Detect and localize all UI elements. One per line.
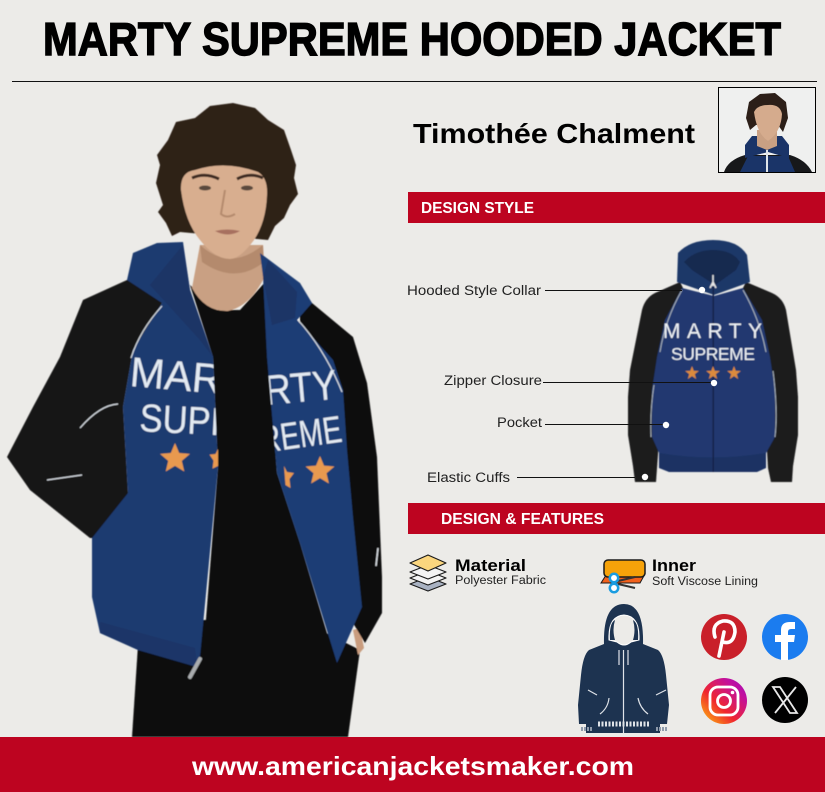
stars print (685, 366, 741, 379)
jacket lettering right (268, 369, 343, 452)
zipper and trim (588, 650, 666, 733)
star 2 (210, 449, 218, 469)
thumbnail blue front (740, 156, 795, 172)
t-shirt (190, 280, 335, 662)
thumbnail hair (746, 93, 788, 132)
right brow (237, 175, 263, 179)
piping left (47, 306, 162, 480)
icon: x (762, 677, 808, 723)
icon: fabric roll and scissors (601, 560, 645, 592)
hem ribbing (598, 722, 650, 726)
hair (156, 103, 298, 240)
label: pocket (497, 415, 669, 430)
mouth (215, 230, 240, 234)
face (181, 165, 267, 259)
hoodie body (578, 604, 669, 733)
stars on jacket (160, 443, 334, 488)
thumbnail hood (745, 136, 789, 158)
MARTY print: MARTY (663, 320, 762, 343)
feature: material (410, 555, 546, 591)
thumbnail zipper (766, 150, 768, 172)
body (652, 288, 775, 468)
fringe (179, 125, 272, 180)
product jacket artwork (628, 240, 798, 482)
hood inner (684, 250, 740, 285)
piping (651, 290, 776, 437)
icon: facebook (762, 614, 808, 660)
zipper pull (710, 275, 716, 288)
hem rib (100, 622, 197, 667)
SUPREME left: SUPR (139, 397, 237, 445)
footer bar (0, 737, 825, 792)
title rule (12, 81, 817, 82)
label: elastic cuffs (427, 470, 648, 485)
cuff ribbing (581, 727, 667, 731)
section bar: design and features (408, 503, 825, 534)
trousers (132, 620, 360, 737)
MARTY left: MAR (128, 348, 224, 403)
label: hooded style collar (407, 283, 705, 298)
right jacket panel (260, 253, 362, 663)
right sleeve (300, 290, 382, 643)
feature: inner (601, 557, 758, 592)
nose (221, 190, 235, 216)
website url: www.americanjacketsmaker.com (191, 751, 634, 781)
right sleeve stripes (376, 548, 378, 566)
SUPREME print: SUPREME (671, 344, 755, 364)
hem (659, 453, 766, 472)
label: zipper closure (444, 373, 717, 388)
section bar: design style (408, 192, 825, 223)
star 1 (160, 443, 190, 472)
thumbnail face (754, 105, 782, 141)
model name: Timothée Chalment (413, 118, 695, 149)
SUPREME right: REME (257, 409, 344, 462)
neck (192, 245, 264, 311)
inner text: Inner (652, 557, 697, 575)
zipper (712, 284, 714, 472)
zipper pull (190, 659, 200, 677)
right eye (241, 186, 253, 190)
left jacket panel (92, 242, 218, 667)
icon: hoodie illustration (578, 604, 669, 733)
material text: Material (455, 557, 526, 575)
label: elastic cuffs: Elastic Cuffs (427, 470, 510, 485)
left brow (192, 175, 219, 179)
left hood lining shadow (150, 245, 213, 357)
right sleeve (742, 282, 798, 482)
left hand (112, 512, 119, 540)
left sleeve (7, 280, 185, 538)
right hood lining (263, 260, 297, 325)
inner value: Soft Viscose Lining (652, 576, 758, 588)
icon: pinterest (701, 614, 747, 660)
left eye (199, 186, 211, 190)
icon: instagram (701, 678, 747, 724)
thumbnail frame (718, 88, 816, 172)
label: zipper closure: Zipper Closure (444, 373, 542, 388)
right hand (353, 628, 364, 655)
icon: fabric layers (410, 555, 446, 591)
label: pocket: Pocket (497, 415, 542, 430)
thumbnail black sleeves (724, 155, 812, 172)
star (706, 366, 720, 379)
left sleeve (628, 282, 684, 482)
neck shadow (200, 245, 264, 274)
star 3 (284, 466, 294, 488)
portrait thumbnail (718, 88, 816, 172)
star (727, 366, 741, 379)
hair/hood inner (610, 620, 638, 640)
star 4 (306, 456, 334, 484)
label: hooded style collar: Hooded Style Collar (407, 283, 542, 298)
jacket lettering left (132, 356, 218, 436)
piping right (298, 320, 342, 392)
MARTY right: RTY (263, 361, 339, 414)
material value: Polyester Fabric (455, 575, 546, 587)
hoodie face opening (609, 615, 639, 645)
design style heading: DESIGN STYLE (421, 200, 534, 217)
thumbnail neck (757, 130, 777, 150)
hood (677, 240, 750, 295)
features heading: DESIGN & FEATURES (441, 511, 604, 528)
head (156, 103, 298, 259)
model photo: man wearing the jacket (7, 103, 382, 737)
jacket product diagram (407, 240, 798, 485)
star (685, 366, 699, 379)
